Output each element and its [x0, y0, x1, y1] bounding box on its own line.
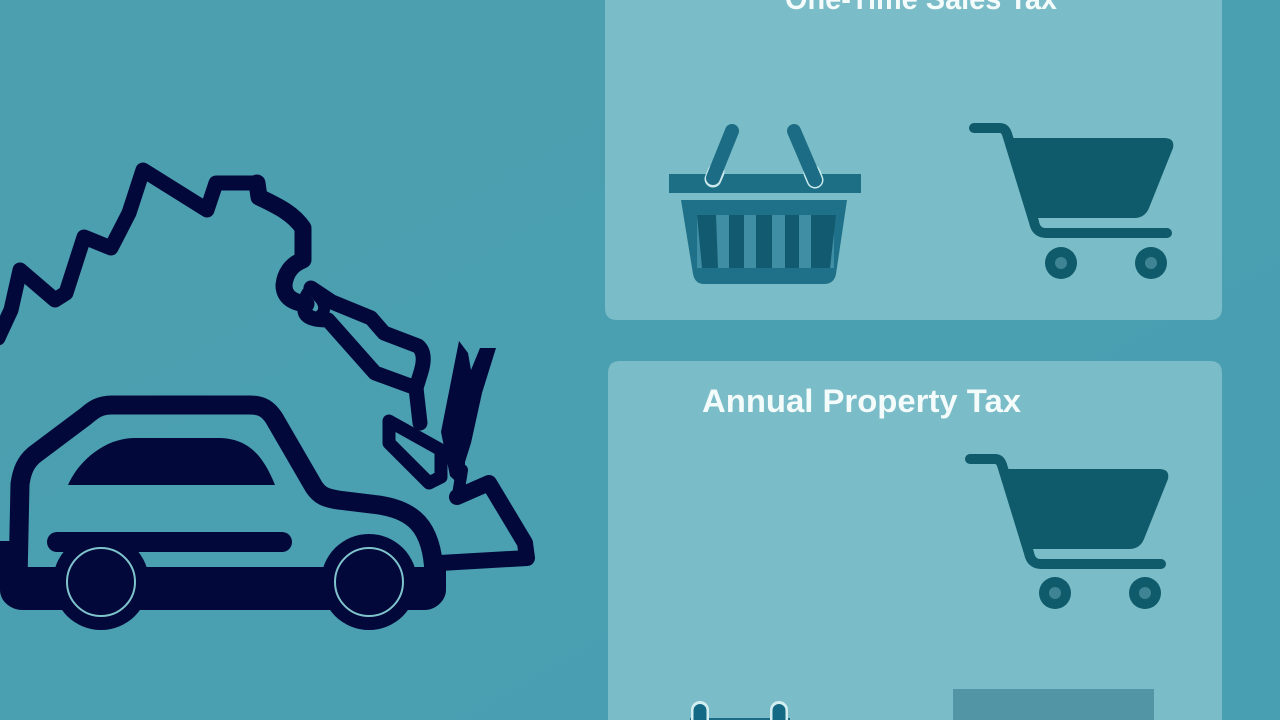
- car window: [68, 438, 275, 485]
- grey block, cropped at bottom edge: [953, 689, 1154, 720]
- cart handle and frame: [974, 128, 1167, 233]
- icon: calendar, cropped at bottom edge: [690, 701, 790, 720]
- basket handles: [713, 131, 815, 180]
- rear stub: [0, 541, 10, 571]
- heading: Annual Property Tax: [702, 383, 1021, 419]
- front wheel: [321, 534, 417, 630]
- icon: shopping basket: [669, 131, 861, 284]
- basket slats: [697, 215, 836, 268]
- state outline: [0, 170, 527, 563]
- car: [0, 405, 446, 630]
- basket body: [681, 200, 847, 284]
- cart basket: [1010, 138, 1173, 218]
- panel: annual property tax: [608, 361, 1222, 720]
- icon: shopping cart: [970, 459, 1168, 609]
- panel background: [608, 361, 1222, 720]
- cart wheels: [1045, 247, 1167, 279]
- basket rim: [669, 174, 861, 193]
- leaf spike: [441, 341, 496, 490]
- car side stripe: [47, 532, 292, 552]
- car body outline: [18, 405, 434, 590]
- cart basket: [1005, 469, 1168, 549]
- cart wheels: [1039, 577, 1161, 609]
- panel: one-time sales tax: [605, 0, 1222, 320]
- rear wheel: [53, 534, 149, 630]
- icon: shopping cart: [974, 128, 1173, 279]
- car underbody: [0, 567, 446, 610]
- panel background: [605, 0, 1222, 320]
- cart handle and frame: [970, 459, 1161, 564]
- illustration: car in front of state outline: [0, 170, 527, 630]
